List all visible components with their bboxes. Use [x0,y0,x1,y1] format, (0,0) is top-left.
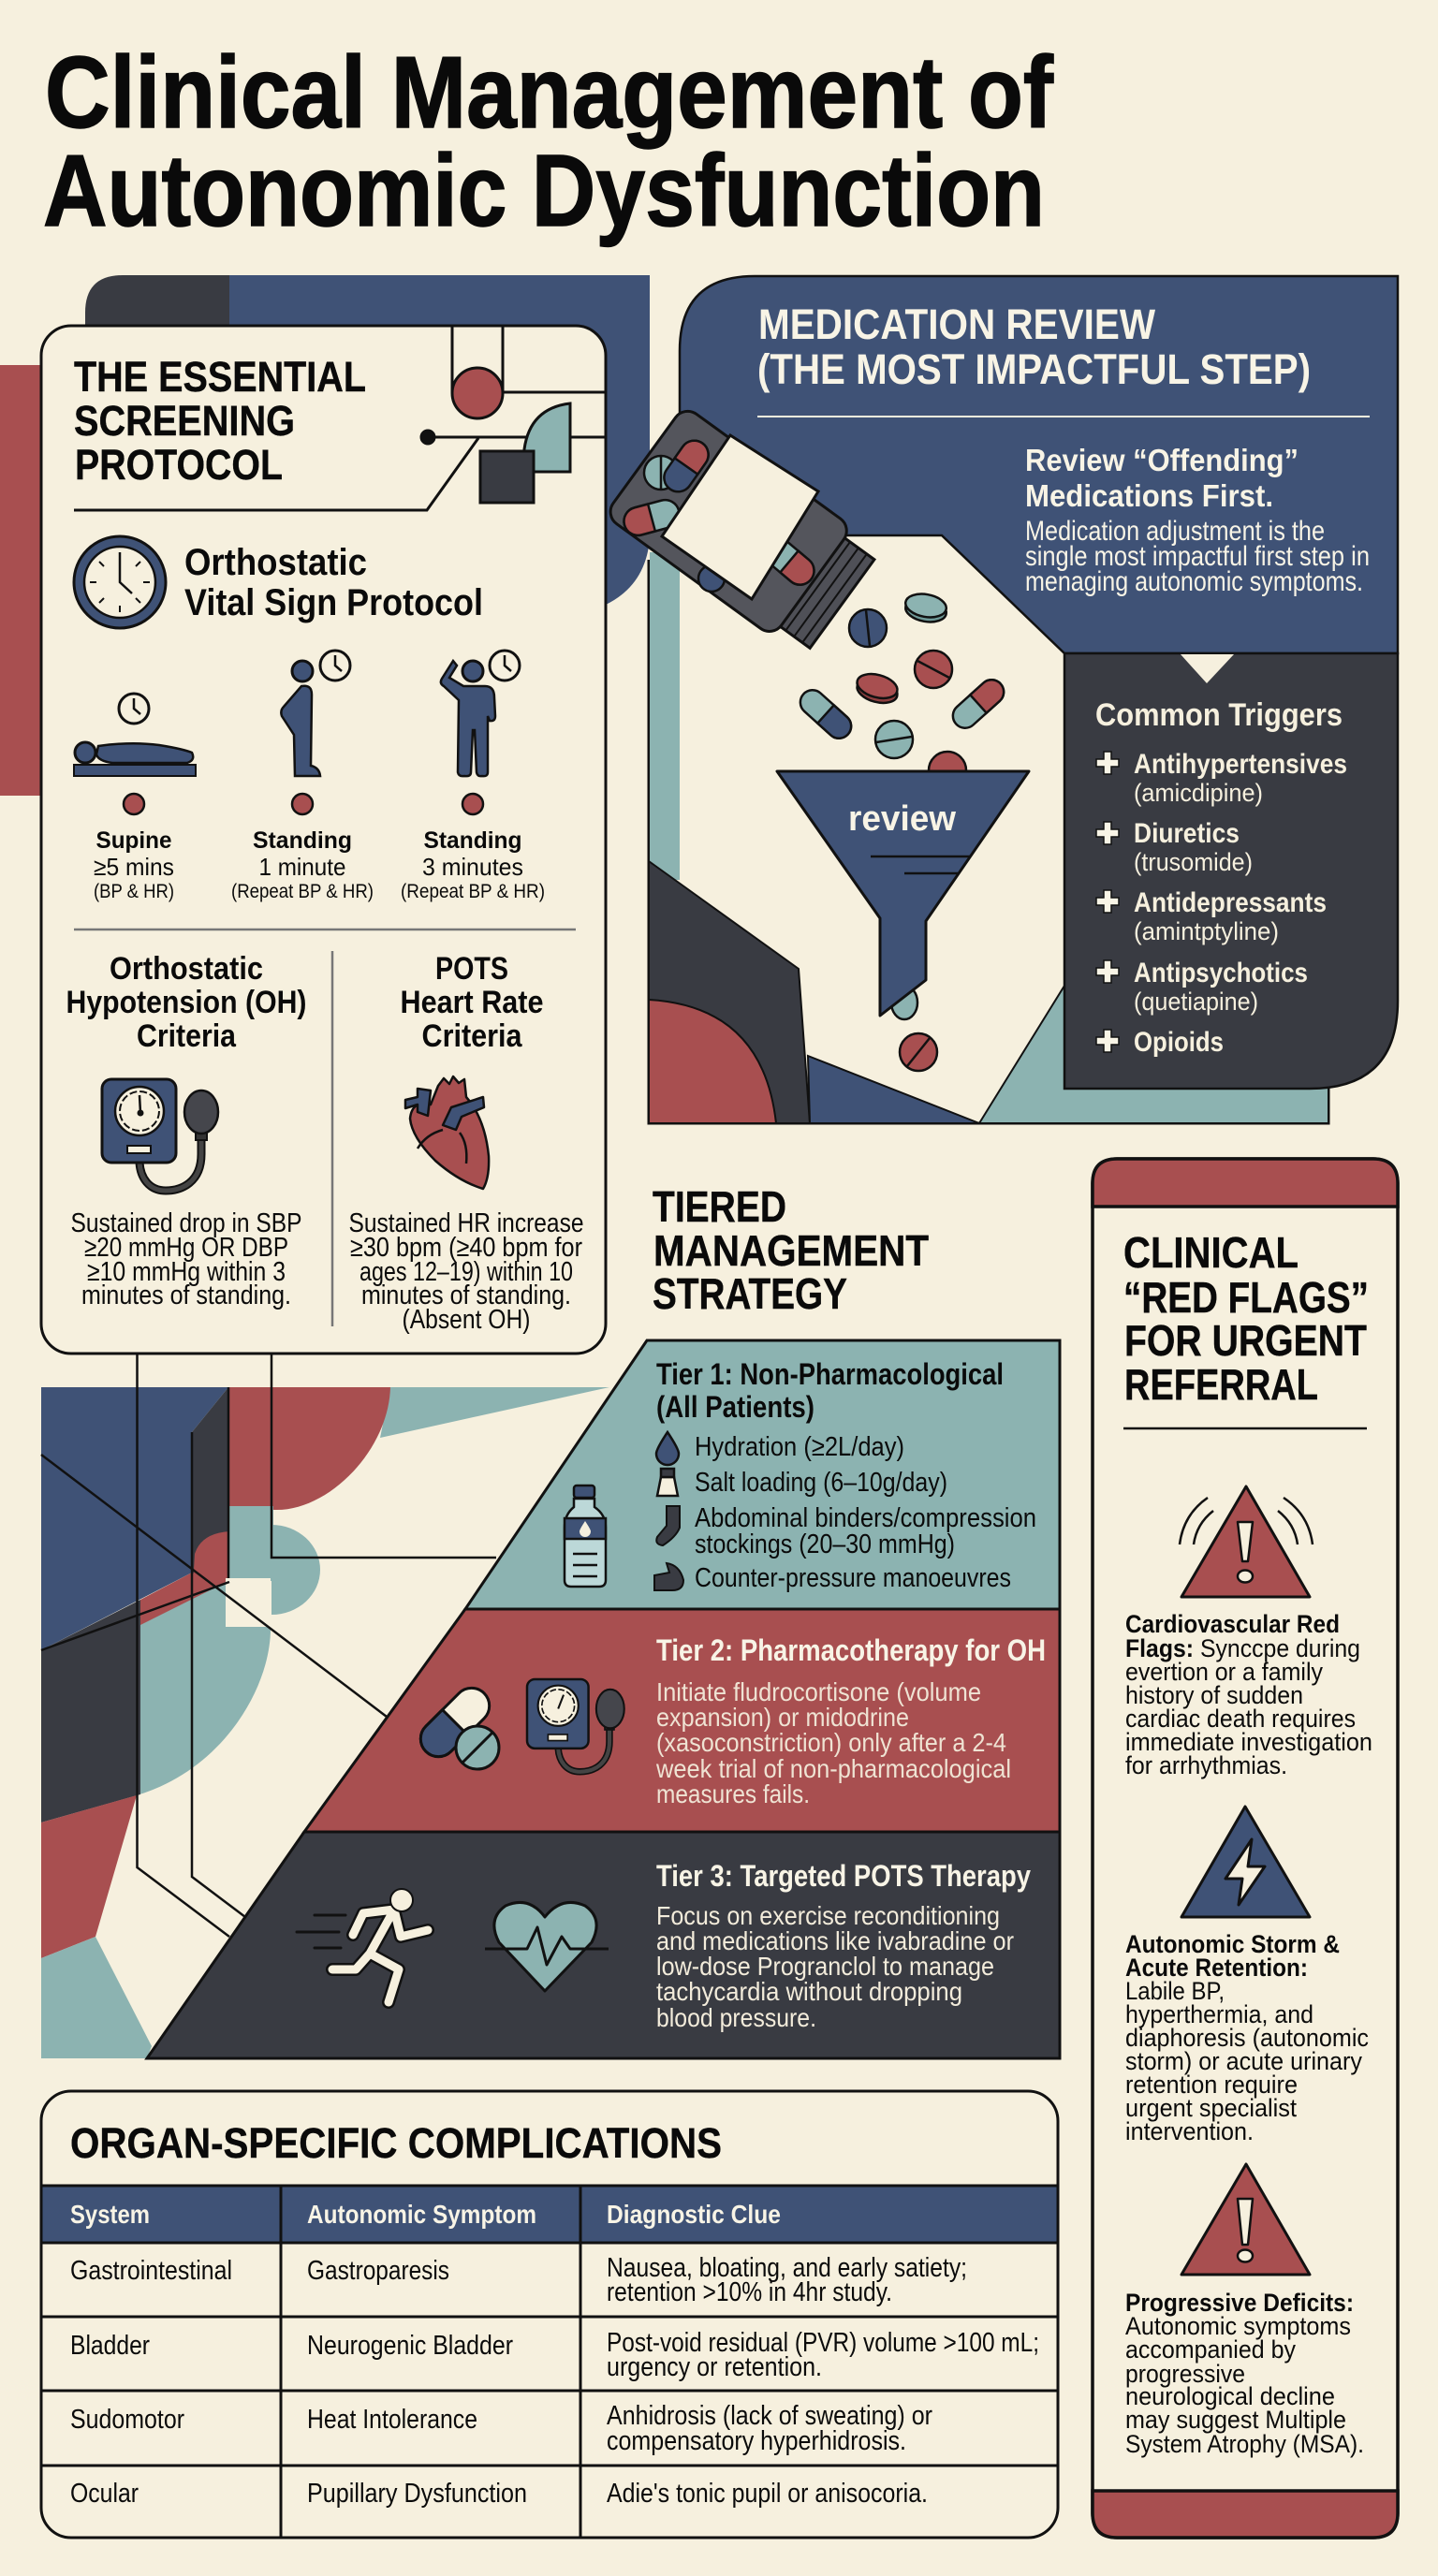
text: progressive deficits [1125,2289,1364,2458]
table row: ocular: Pupillary Dysfunction [307,2479,527,2509]
text: autonomic storm: Acute Retention: [1125,1954,1308,1982]
text: progressive deficits: accompanied by [1125,2335,1296,2364]
trigger list: (quetiapine) [1134,988,1258,1016]
step: supine [74,694,196,902]
heading: medication review: (THE MOST IMPACTFUL STEP) [757,345,1311,393]
trigger list: Diuretics [1134,818,1240,849]
heading: OH criteria [66,951,307,1054]
table row: sudomotor [70,2401,932,2456]
step: standing 1 minute: Standing [253,827,352,854]
list: tier 1 measures: stockings (20–30 mmHg) [695,1530,955,1559]
icon: flexed arm [654,1563,683,1590]
panel: medication review [605,276,1398,1123]
table row: ocular: Adie's tonic pupil or anisocoria. [607,2479,928,2509]
text: tier 3 description: blood pressure. [656,2003,816,2032]
text: POTS criteria description [348,1208,584,1335]
trigger list: Antihypertensives [1134,749,1347,780]
table row: gastrointestinal: Gastroparesis [307,2256,449,2286]
text: OH criteria description: Sustained drop in SBP [71,1208,301,1238]
table row: sudomotor: Anhidrosis (lack of sweating) or [607,2401,932,2431]
tier 1 band [465,1340,1060,1609]
panel: common triggers [1064,653,1398,1089]
table row: gastrointestinal: retention >10% in 4hr study. [607,2277,892,2307]
table header row [41,2186,1058,2243]
text: review offending medications: Medication adjustment is the [1025,516,1325,547]
text: cardiovascular red flags: immediate investigation [1125,1728,1372,1756]
panel: common triggers: Common Triggers [1095,697,1343,733]
text: cardiovascular red flags: Flags: Synccpe during [1125,1634,1360,1662]
step: standing 3 minutes: (Repeat BP & HR) [401,881,545,902]
panel: essential screening protocol [41,326,606,1354]
text: autonomic storm: retention require [1125,2071,1298,2099]
icon: heart with ECG line [485,1902,609,1991]
decorative circuit motif [74,326,606,510]
text: POTS criteria description: (Absent OH) [403,1305,530,1335]
icon: pills [413,1680,499,1769]
step: standing 1 minute: 1 minute [258,853,346,881]
heading: tiered management strategy [653,1182,929,1318]
trigger list [1134,749,1347,1058]
text: autonomic storm [1125,1930,1369,2145]
step: standing 3 minutes: 3 minutes [422,853,523,881]
step: standing 1 minute: (Repeat BP & HR) [231,881,374,902]
text: tier 3 description: and medications like ivabradine or [656,1926,1014,1955]
table row: ocular: Ocular [70,2479,139,2509]
text: review offending medications: Medications First. [1025,478,1273,513]
text: cardiovascular red flags: evertion or a family [1125,1658,1323,1686]
text: OH criteria description: minutes of standing. [81,1281,291,1310]
illustration frame and background shapes [649,552,1328,1123]
text: progressive deficits: Autonomic symptoms [1125,2312,1351,2340]
title: Autonomic Dysfunction [43,134,1045,248]
text: review offending medications: Review “Offending” [1025,443,1299,477]
text: cardiovascular red flags: cardiac death requires [1125,1705,1356,1733]
heading: red flags: “RED FLAGS” [1123,1273,1369,1322]
trigger list: (amicdipine) [1134,779,1263,807]
icon: review funnel: review [848,799,956,839]
heading: OH criteria: Orthostatic [110,951,263,987]
text: review offending medications [1025,443,1370,597]
trigger list: (trusomide) [1134,848,1253,876]
table row: bladder: Neurogenic Bladder [307,2331,513,2361]
tier 2 band [304,1609,1060,1832]
abstract geometric artwork [41,1354,609,2058]
heading: orthostatic vital sign protocol [184,542,483,623]
icon: water droplet [656,1432,679,1465]
step: supine: Supine [95,827,172,854]
table row: bladder: urgency or retention. [607,2352,822,2382]
text: progressive deficits: neurological decline [1125,2382,1335,2410]
table row: sudomotor: compensatory hyperhidrosis. [607,2426,906,2456]
panel: clinical red flags [1093,1159,1398,2538]
text: OH criteria description: ≥20 mmHg OR DBP [84,1233,288,1263]
heading: tiered management strategy: STRATEGY [653,1269,847,1318]
icon: anatomical heart [405,1076,489,1189]
text: autonomic storm: storm) or acute urinary [1125,2047,1362,2075]
step: standing 3 minutes: Standing [423,827,522,854]
red top band [1093,1159,1398,1207]
table row: gastrointestinal: Gastrointestinal [70,2256,232,2286]
text: autonomic storm: Labile BP, [1125,1977,1225,2005]
text: OH criteria description [71,1208,301,1310]
icon: progressive deficits warning triangle [1181,2164,1310,2275]
screening backdrop shapes [0,275,650,796]
trigger list: Antipsychotics [1134,958,1308,988]
heading: POTS criteria [401,951,543,1054]
text: cardiovascular red flags: for arrhythmias. [1125,1751,1287,1779]
text: cardiovascular red flags [1125,1610,1372,1779]
bullet icons [1096,752,1119,1052]
text: POTS criteria description: Sustained HR increase [348,1208,584,1238]
heading: POTS criteria: Criteria [421,1018,522,1054]
list: tier 1 measures [695,1432,1036,1593]
tier 3 band [147,1832,1060,2058]
title [43,36,1054,248]
text: autonomic storm: urgent specialist [1125,2094,1297,2122]
icon: lightning warning triangle [1181,1807,1310,1917]
step: standing 3 minutes [401,651,545,902]
heading: POTS criteria: POTS [435,951,508,987]
heading: POTS criteria: Heart Rate [401,985,543,1020]
heading: OH criteria: Hypotension (OH) [66,985,307,1020]
icon: review funnel [777,771,1029,1016]
icon: cardiovascular warning triangle [1180,1486,1313,1597]
text: OH criteria description: ≥10 mmHg within 3 [87,1257,286,1287]
text: tier 2 description: expansion) or midodrine [656,1703,909,1732]
table row: bladder: Post-void residual (PVR) volume >100 mL; [607,2328,1039,2358]
list: tier 1 measures: Counter-pressure manoeuvres [695,1563,1011,1593]
step: supine: ≥5 mins [94,853,174,881]
heading: red flags: FOR URGENT [1124,1316,1367,1365]
heading: orthostatic vital sign protocol: Orthostatic [184,542,367,583]
heading: tier 1: (All Patients) [656,1390,814,1424]
icon: compression stocking [656,1506,680,1545]
icon: clock [74,536,166,628]
text: tier 2 description: measures fails. [656,1779,810,1808]
text: autonomic storm: intervention. [1125,2117,1254,2145]
table header row: Autonomic Symptom [307,2200,536,2229]
text: tier 2 description: Initiate fludrocortisone (volume [656,1677,981,1706]
heading: screening protocol: PROTOCOL [75,441,283,489]
title: Clinical Management of [45,36,1054,150]
table row: bladder: Bladder [70,2331,150,2361]
icon: salt shaker [657,1469,678,1496]
heading: tier 1: Tier 1: Non-Pharmacological [656,1357,1004,1391]
list: tier 1 measures: Hydration (≥2L/day) [695,1432,904,1462]
heading: tier 3: Tier 3: Targeted POTS Therapy [656,1859,1031,1893]
text: tier 2 description: week trial of non-pharmacological [655,1754,1011,1783]
heading: OH criteria: Criteria [137,1018,237,1054]
text: review offending medications: menaging autonomic symptoms. [1025,566,1363,597]
table row: gastrointestinal [70,2253,967,2307]
text: cardiovascular red flags: Cardiovascular Red [1125,1610,1340,1638]
heading: medication review: MEDICATION REVIEW [758,300,1155,348]
icon: running figure [297,1889,428,2002]
panel: organ-specific complications [41,2091,1058,2538]
trigger list: Opioids [1134,1027,1224,1058]
icon: water bottle [565,1486,606,1587]
table row: gastrointestinal: Nausea, bloating, and early satiety; [607,2253,967,2283]
heading: tiered management strategy: TIERED [653,1182,786,1231]
text: tier 3 description: low-dose Progranclol to manage [656,1952,994,1981]
heading: screening protocol [74,353,366,489]
text: autonomic storm: diaphoresis (autonomic [1125,2024,1369,2052]
icon: tipped pill bottle [605,405,882,659]
heading: tiered management strategy: MANAGEMENT [653,1226,929,1275]
heading: medication review [757,300,1311,393]
text: POTS criteria description: ages 12–19) within 10 [360,1257,573,1287]
table row: sudomotor: Heat Intolerance [307,2405,477,2435]
icon: blood pressure monitor small [527,1679,624,1772]
trigger list: (amintptyline) [1134,917,1279,945]
text: POTS criteria description: minutes of standing. [361,1281,571,1310]
heading: tier 1 [656,1357,1004,1424]
text: progressive deficits: System Atrophy (MSA). [1125,2430,1364,2458]
step: supine: (BP & HR) [94,881,174,902]
text: tier 2 description: (xasoconstriction) only after a 2-4 [656,1728,1006,1757]
table row: ocular [70,2479,928,2509]
table row: sudomotor: Sudomotor [70,2405,184,2435]
heading: organ-specific complications: ORGAN-SPECIFIC COMPLICATIONS [70,2119,722,2167]
heading: screening protocol: SCREENING [74,397,295,445]
table header row: System [70,2200,150,2229]
text: progressive deficits: progressive [1125,2360,1245,2388]
heading: red flags: REFERRAL [1124,1360,1318,1409]
text: progressive deficits: may suggest Multiple [1125,2406,1346,2434]
text: tier 3 description: Focus on exercise reconditioning [656,1901,1000,1930]
heading: tier 2: Tier 2: Pharmacotherapy for OH [656,1633,1046,1667]
list: tier 1 measures: Abdominal binders/compression [695,1503,1036,1533]
red bottom band [1093,2491,1398,2538]
table header row: Diagnostic Clue [607,2200,781,2229]
text: tier 3 description [656,1901,1014,2032]
text: tier 3 description: tachycardia without dropping [656,1977,962,2006]
text: POTS criteria description: ≥30 bpm (≥40 bpm for [350,1233,582,1263]
trigger list: Antidepressants [1134,887,1327,918]
list: tier 1 measures: Salt loading (6–10g/day) [695,1468,947,1498]
heading: red flags: CLINICAL [1123,1228,1299,1277]
step: standing 1 minute [231,651,374,902]
text: autonomic storm: Autonomic Storm & [1125,1930,1340,1958]
text: autonomic storm: hyperthermia, and [1125,2000,1313,2028]
text: cardiovascular red flags: history of sudden [1125,1681,1303,1709]
icon: falling pills [796,591,1008,1071]
text: tier 2 description [655,1677,1011,1808]
medication header block [680,276,1398,653]
heading: screening protocol: THE ESSENTIAL [74,353,366,401]
text: progressive deficits: Progressive Deficits: [1125,2289,1354,2317]
icon: blood pressure monitor [102,1079,218,1191]
heading: orthostatic vital sign protocol: Vital Sign Protocol [184,582,483,623]
heading: red flags [1123,1228,1369,1409]
table row: bladder [70,2328,1039,2382]
text: review offending medications: single most impactful first step in [1025,541,1370,572]
